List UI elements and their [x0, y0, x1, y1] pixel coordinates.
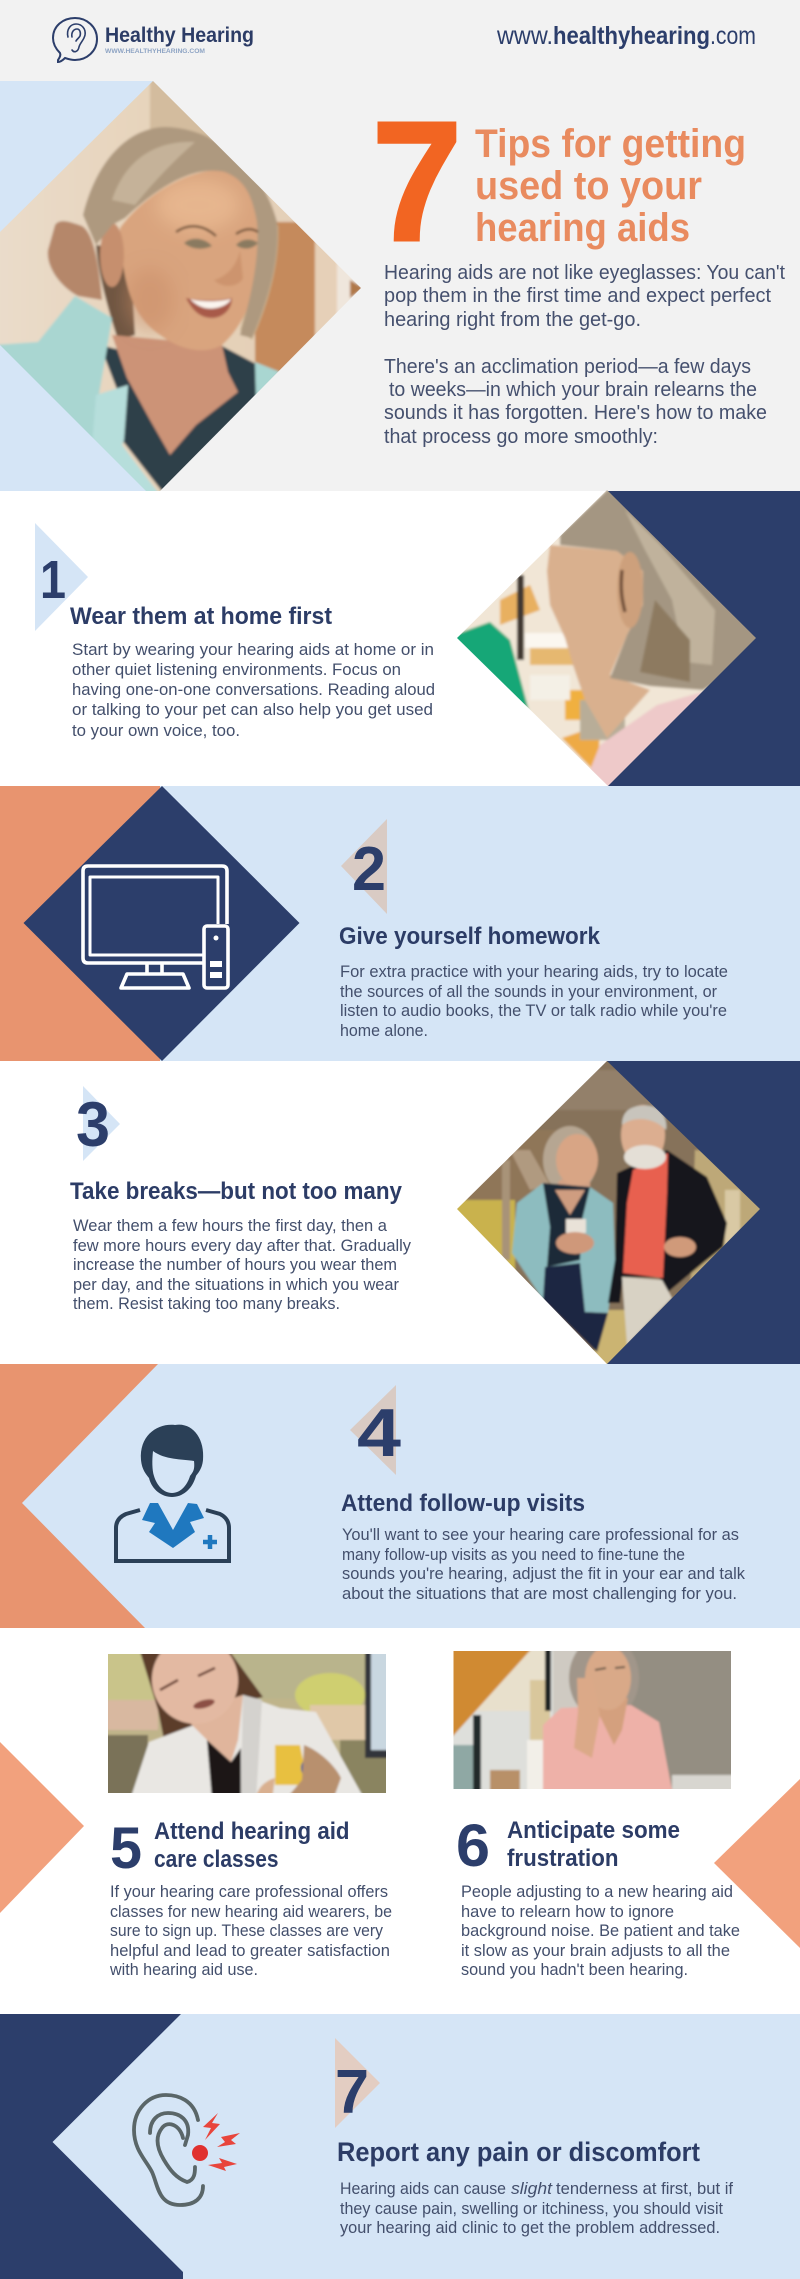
panel: tip 3 [70, 1061, 800, 1364]
body text: You'll want to see your hearing care professional for as [342, 1525, 739, 1544]
tip 5 body text: classes for new hearing aid wearers, be [110, 1902, 392, 1921]
body text: or talking to your pet can also help you get used [72, 700, 433, 719]
tip 6 numeral and heading [456, 1812, 680, 1879]
website address: .com [710, 22, 756, 50]
hair [140, 1654, 264, 1738]
number badge 1: 1 [40, 550, 66, 610]
number badge 2: 2 [352, 835, 386, 904]
coat lapel [241, 1695, 262, 1800]
icon: hearing care professional [116, 1425, 229, 1561]
tip 6 body text [461, 1882, 740, 1979]
body text: them. Resist taking too many breaks. [73, 1294, 340, 1313]
tip 5 body text [109, 1882, 392, 1979]
photo: woman's ear, side view [457, 490, 756, 786]
body text [342, 1525, 745, 1603]
ear model [275, 1745, 308, 1785]
heading: Report any pain or discomfort [337, 2137, 700, 2167]
body text: the sources of all the sounds in your environment, or [340, 982, 717, 1001]
orange backing block [0, 786, 160, 1061]
body text: your hearing aid clinic to get the problem addressed. [340, 2218, 720, 2237]
body text: per day, and the situations in which you wear [73, 1275, 399, 1294]
photo: smiling woman touching her ear [0, 70, 377, 500]
body text: listen to audio books, the TV or talk radio while you're [340, 1001, 727, 1020]
orange arrow right [714, 1779, 800, 1948]
number badge 2 [341, 819, 387, 914]
tip 6 body text: background noise. Be patient and take [461, 1921, 740, 1940]
intro paragraph: that process go more smoothly: [384, 426, 658, 448]
tip 6 numeral and heading: 6 [456, 1812, 490, 1879]
man [608, 1150, 727, 1303]
heading: Take breaks—but not too many [70, 1178, 403, 1205]
logo: Healthy Hearing: WWW.HEALTHYHEARING.COM [105, 48, 205, 55]
blouse [543, 1705, 673, 1795]
number badge 4 [350, 1385, 401, 1475]
orange arrow left [0, 1742, 84, 1913]
body text: Hearing aids can cause [340, 2179, 506, 2198]
icon: sore ear [134, 2095, 240, 2205]
intro paragraph: sounds it has forgotten. Here's how to make [384, 402, 767, 424]
photo: woman frustrated, hand to ear [454, 1651, 731, 1789]
navy arrow block [0, 2014, 183, 2279]
tip 5 body text: helpful and lead to greater satisfaction [110, 1941, 390, 1960]
pink collar [590, 692, 705, 790]
panel: tip 4 [0, 1364, 800, 1628]
neck and face [547, 545, 650, 738]
nose shadow [216, 255, 242, 286]
body text: few more hours every day after that. Gradually [73, 1236, 411, 1255]
tip 6 numeral and heading: frustration [507, 1845, 618, 1872]
intro paragraph [384, 262, 785, 448]
panel: tip 2 [0, 786, 800, 1061]
number badge 1 [35, 523, 88, 631]
smile [186, 298, 232, 318]
neck [182, 1695, 243, 1762]
monitor [364, 1654, 386, 1759]
heading: Attend follow-up visits [341, 1490, 585, 1517]
website address [496, 22, 756, 50]
tip 6 body text: People adjusting to a new hearing aid [461, 1882, 733, 1901]
hair behind ear [96, 245, 135, 340]
title: Tips for getting [475, 122, 746, 166]
intro paragraph: Hearing aids are not like eyeglasses: You can't [384, 262, 785, 284]
tip 6 body text: sound you hadn't been hearing. [461, 1960, 688, 1979]
body text: For extra practice with your hearing aids, try to locate [340, 962, 728, 981]
body text: home alone. [340, 1021, 428, 1040]
body text [73, 1216, 411, 1313]
body text: tenderness at first, but if [556, 2179, 733, 2198]
dark shirt [100, 345, 262, 495]
website address: www. [496, 22, 553, 50]
tip 5 body text: If your hearing care professional offers [110, 1882, 388, 1901]
navy backing block [607, 1061, 800, 1364]
hair highlight back [240, 225, 278, 340]
body text: Wear them a few hours the first day, then a [73, 1216, 388, 1235]
face [120, 170, 259, 350]
body text: many follow-up visits as you need to fine-tune the [342, 1545, 685, 1564]
ear [617, 552, 643, 628]
body text: about the situations that are most challenging for you. [342, 1584, 737, 1603]
tip 5 numeral and heading: Attend hearing aid [154, 1818, 350, 1845]
big orange numeral 7: 7 [372, 87, 462, 277]
tip 5 body text: sure to sign up. These classes are very [110, 1921, 383, 1940]
face [150, 1654, 240, 1725]
intro paragraph: to weeks—in which your brain relearns the [389, 379, 757, 401]
number badge 3: 3 [76, 1090, 110, 1160]
orange arrow block [0, 1364, 158, 1628]
tip 5 numeral and heading: 5 [110, 1816, 142, 1881]
body text: they cause pain, swelling or itchiness, you should visit [340, 2199, 723, 2218]
tip 5 numeral and heading: care classes [154, 1846, 278, 1873]
body text [72, 640, 435, 740]
navy diamond [24, 786, 300, 1061]
hand [48, 221, 102, 300]
website address: healthyhearing [553, 22, 710, 50]
tip 6 body text: it slow as your brain adjusts to all the [461, 1941, 730, 1960]
coat [130, 1695, 365, 1800]
intro paragraph: pop them in the first time and expect perfect [384, 285, 771, 307]
woman [542, 1125, 594, 1186]
green garment [457, 620, 530, 710]
title: hearing aids [475, 206, 690, 250]
logo: Healthy Hearing: Healthy Hearing [105, 24, 254, 47]
title: used to your [475, 164, 702, 208]
hair top [83, 127, 277, 338]
navy backing block [608, 491, 800, 786]
number badge 7 [335, 2038, 380, 2128]
number badge 4: 4 [357, 1395, 401, 1471]
photo: audiologist holding ear model [108, 1654, 386, 1793]
intro paragraph: hearing right from the get-go. [384, 309, 641, 331]
body text: other quiet listening environments. Focus on [72, 660, 401, 679]
tip 5 body text: with hearing aid use. [109, 1960, 258, 1979]
panel: tip 7 [0, 2014, 800, 2279]
tip 6 numeral and heading: Anticipate some [507, 1817, 680, 1844]
heading: Wear them at home first [70, 603, 332, 630]
black top [207, 1740, 241, 1800]
panel: header and intro [0, 0, 800, 500]
body text: to your own voice, too. [72, 721, 240, 740]
light blue backing strip [0, 81, 153, 491]
eyes [184, 239, 212, 249]
panel: tips 5 and 6 [0, 1651, 800, 1978]
body text: slight [511, 2179, 553, 2198]
tip 6 body text: have to relearn how to ignore [461, 1902, 674, 1921]
hair [568, 1651, 638, 1706]
tip 5 numeral and heading [110, 1816, 350, 1881]
body text: Start by wearing your hearing aids at home or in [72, 640, 434, 659]
logo: Healthy Hearing [53, 18, 254, 62]
heading: Give yourself homework [339, 923, 601, 950]
hair [558, 490, 756, 692]
body text: sounds you're hearing, adjust the fit in your ear and talk [342, 1564, 745, 1583]
panel: tip 1 [35, 490, 800, 786]
neck and face [598, 1698, 629, 1744]
body text [340, 2179, 733, 2237]
neck and chest [112, 335, 238, 455]
ear [100, 223, 124, 287]
body text: increase the number of hours you wear them [73, 1255, 397, 1274]
title [475, 122, 746, 250]
body text: having one-on-one conversations. Reading aloud [72, 680, 435, 699]
photo: couple walking and talking [457, 1061, 760, 1364]
intro paragraph: There's an acclimation period—a few days [384, 356, 751, 378]
number badge 7: 7 [335, 2058, 369, 2127]
body text [340, 962, 728, 1040]
mint blouse [0, 296, 114, 438]
arm and hand [574, 1678, 600, 1758]
icon: desktop computer [83, 866, 228, 988]
